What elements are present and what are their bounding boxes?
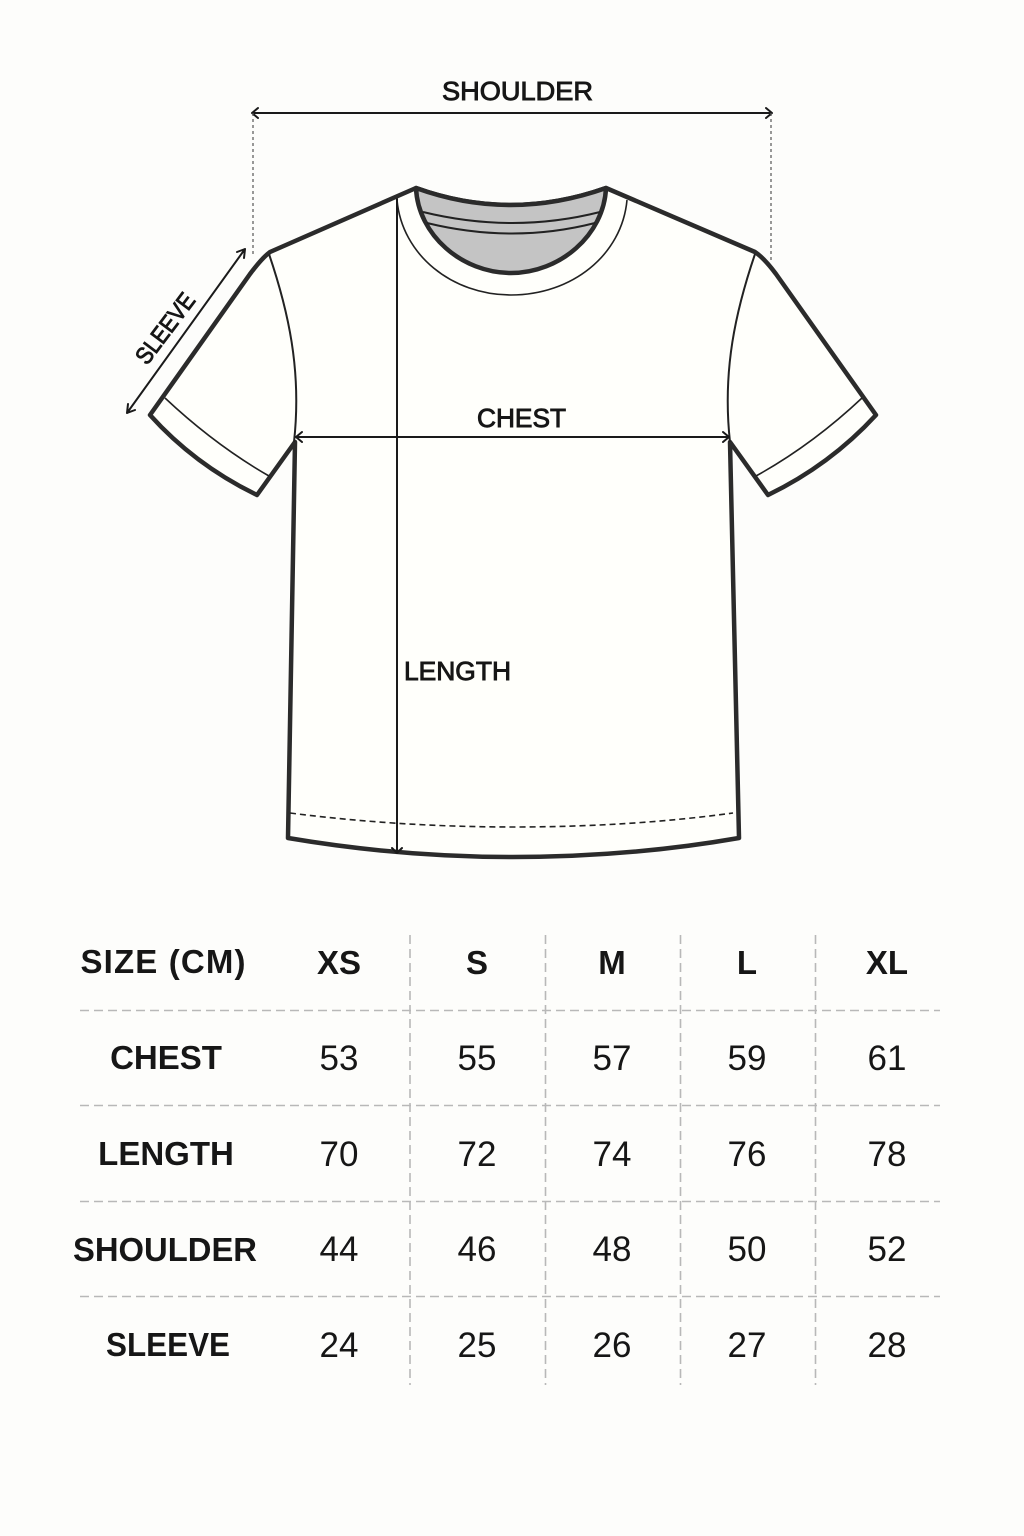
right guide line — [770, 113, 772, 262]
shoulder row — [73, 1230, 906, 1269]
header row: M — [598, 944, 626, 981]
chest row: 61 — [868, 1039, 906, 1078]
t-shirt body fill and outline — [150, 188, 876, 857]
length row — [98, 1135, 906, 1174]
length row: 74 — [593, 1135, 631, 1174]
header row: XS — [317, 944, 361, 981]
shoulder row: SHOULDER — [73, 1231, 257, 1268]
left armhole seam — [269, 254, 296, 442]
sleeve row: 24 — [320, 1326, 358, 1365]
left guide line — [252, 113, 254, 255]
collar rib — [397, 200, 627, 295]
length row: 72 — [458, 1135, 496, 1174]
sleeve arrow — [127, 249, 245, 413]
length row: 76 — [728, 1135, 766, 1174]
header row: L — [737, 944, 757, 981]
length measurement — [392, 199, 511, 853]
shoulder row: 52 — [868, 1230, 906, 1269]
length row: LENGTH — [98, 1135, 234, 1172]
chest row: 55 — [458, 1039, 496, 1078]
shoulder row: 46 — [458, 1230, 496, 1269]
sleeve row: 27 — [728, 1326, 766, 1365]
hem stitch line — [290, 813, 733, 827]
chest arrow — [296, 432, 729, 442]
shoulder arrow — [252, 108, 772, 118]
length arrow — [392, 199, 402, 853]
shoulder row: 48 — [593, 1230, 631, 1269]
left cuff seam — [165, 398, 269, 476]
chest measurement — [296, 403, 729, 442]
sleeve label: SLEEVE — [130, 288, 201, 370]
header row: S — [466, 944, 488, 981]
size table — [73, 935, 940, 1385]
header row: XL — [866, 944, 908, 981]
t-shirt diagram — [150, 188, 876, 857]
chest row — [110, 1039, 906, 1078]
sleeve row: 28 — [868, 1326, 906, 1365]
sleeve row: SLEEVE — [106, 1326, 230, 1363]
chest row: 59 — [728, 1039, 766, 1078]
shoulder label: SHOULDER — [442, 76, 593, 106]
shoulder row: 50 — [728, 1230, 766, 1269]
chest row: 57 — [593, 1039, 631, 1078]
right armhole seam — [728, 254, 755, 442]
sleeve row: 25 — [458, 1326, 496, 1365]
chest label: CHEST — [477, 403, 566, 433]
chest row: CHEST — [110, 1039, 222, 1076]
length row: 70 — [320, 1135, 358, 1174]
right cuff seam — [756, 398, 862, 476]
header row: SIZE (CM) — [80, 943, 246, 980]
length label: LENGTH — [404, 656, 511, 686]
back collar seams — [423, 212, 600, 234]
shoulder row: 44 — [320, 1230, 358, 1269]
shoulder measurement — [252, 76, 772, 262]
neck opening — [416, 188, 606, 273]
table grid — [80, 935, 940, 1385]
length row: 78 — [868, 1135, 906, 1174]
sleeve measurement — [127, 249, 245, 413]
sleeve row: 26 — [593, 1326, 631, 1365]
chest row: 53 — [320, 1039, 358, 1078]
header row — [80, 943, 908, 981]
sleeve row — [106, 1326, 906, 1365]
